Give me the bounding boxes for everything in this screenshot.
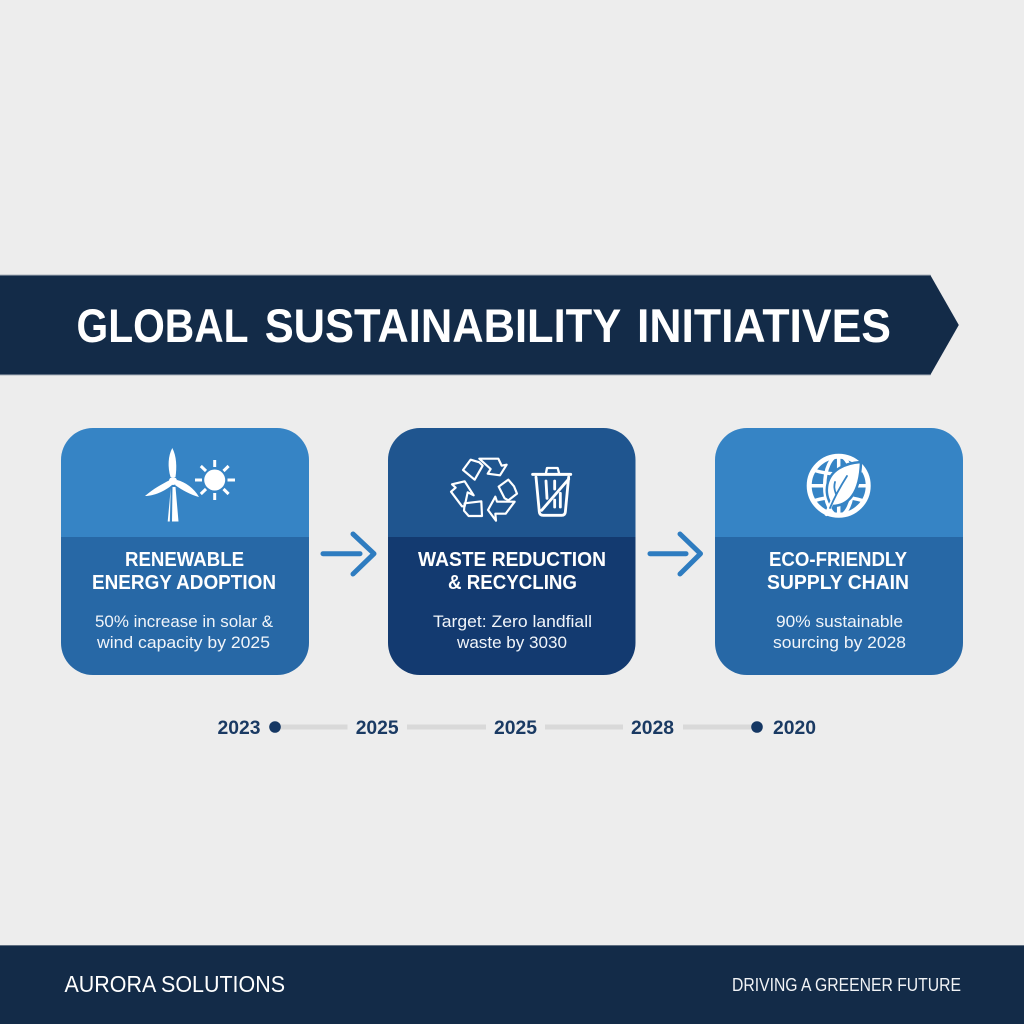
title: [76, 299, 891, 352]
timeline: 2025: [494, 717, 537, 739]
card heading: SUPPLY CHAIN: [767, 571, 909, 594]
card description: waste by 3030: [456, 633, 567, 652]
arrow: step one to two: [323, 534, 374, 574]
card heading: RENEWABLE: [125, 548, 244, 571]
timeline: 2020: [773, 717, 816, 739]
company name: AURORA SOLUTIONS: [64, 971, 285, 997]
title: SUSTAINABILITY: [265, 299, 621, 352]
card heading: [92, 548, 276, 594]
footer: [0, 945, 1024, 1024]
title: GLOBAL: [76, 299, 248, 352]
icon: wind turbine and sun: [145, 448, 235, 522]
title banner: [0, 274, 959, 376]
card description: wind capacity by 2025: [96, 633, 270, 652]
tagline: DRIVING A GREENER FUTURE: [732, 975, 961, 995]
card heading: [767, 548, 909, 594]
card description: [95, 612, 274, 652]
card description: sourcing by 2028: [773, 633, 906, 652]
icon: recycling symbol: [451, 459, 517, 521]
timeline: 2028: [631, 717, 674, 739]
card description: Target: Zero landfiall: [433, 612, 592, 631]
timeline: [218, 717, 816, 739]
card description: [773, 612, 906, 652]
panel: waste reduction and recycling: [388, 428, 636, 675]
card heading: ENERGY ADOPTION: [92, 571, 276, 594]
timeline: 2023: [218, 717, 261, 739]
icon: crossed-out trash bin: [533, 468, 571, 515]
card description: 90% sustainable: [776, 612, 903, 631]
panel: renewable energy adoption: [61, 428, 309, 675]
panel: eco-friendly supply chain: [715, 428, 963, 675]
card description: [433, 612, 592, 652]
card heading: ECO-FRIENDLY: [769, 548, 907, 571]
timeline: 2025: [356, 717, 399, 739]
title: INITIATIVES: [637, 299, 891, 352]
card heading: WASTE REDUCTION: [418, 548, 606, 571]
arrow: step two to three: [650, 534, 700, 574]
icon: globe with leaf: [809, 456, 868, 516]
card heading: & RECYCLING: [448, 571, 577, 594]
card description: 50% increase in solar &: [95, 612, 274, 631]
card heading: [418, 548, 606, 594]
